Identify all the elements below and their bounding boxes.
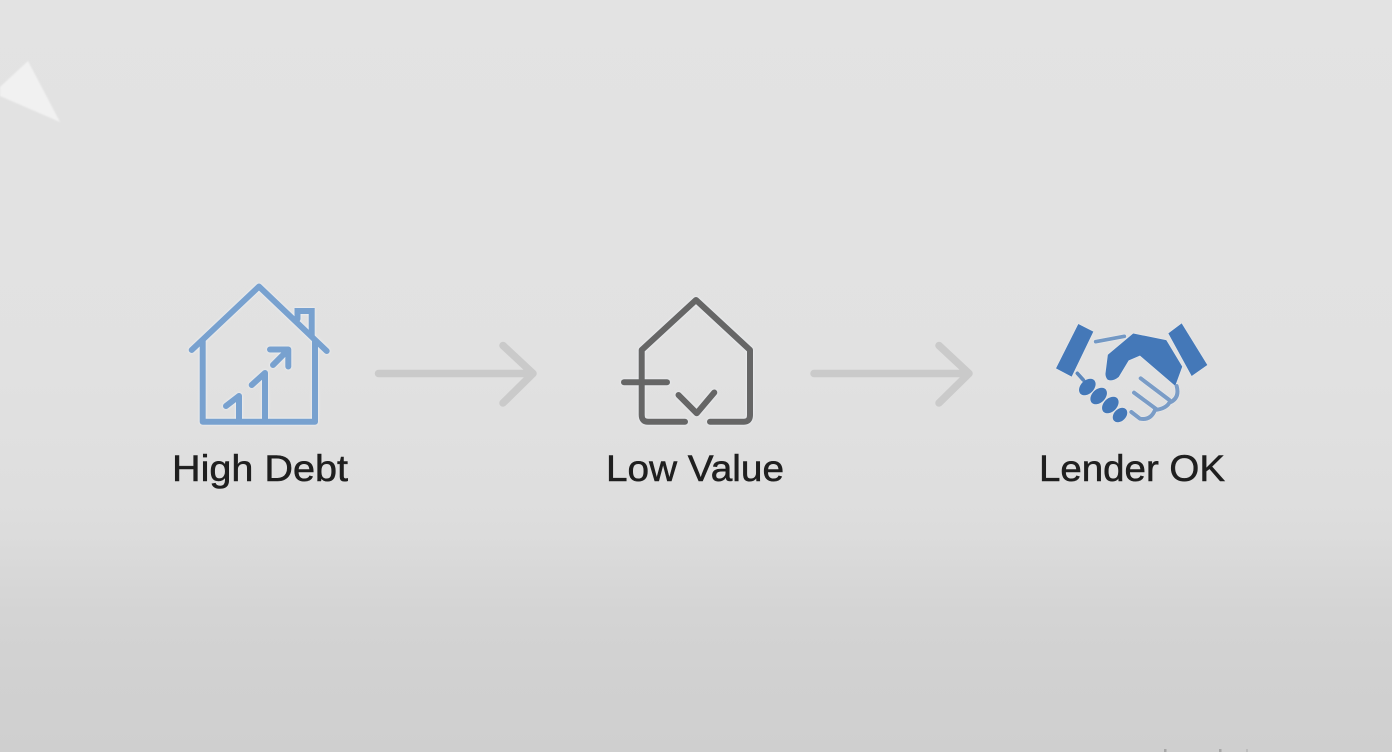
bottom edge specks <box>1164 749 1248 752</box>
label: High Debt: High Debt <box>172 448 349 489</box>
icon: low value house with check mark <box>624 300 750 422</box>
arrow: first step <box>378 346 533 403</box>
label: Low Value: Low Value <box>606 448 784 489</box>
label: Lender OK: Lender OK <box>1039 448 1225 489</box>
arrow: second step <box>814 346 969 403</box>
icon: handshake <box>1056 323 1207 425</box>
icon: house with rising debt arrows <box>192 286 327 422</box>
decorative white triangle <box>0 61 60 122</box>
